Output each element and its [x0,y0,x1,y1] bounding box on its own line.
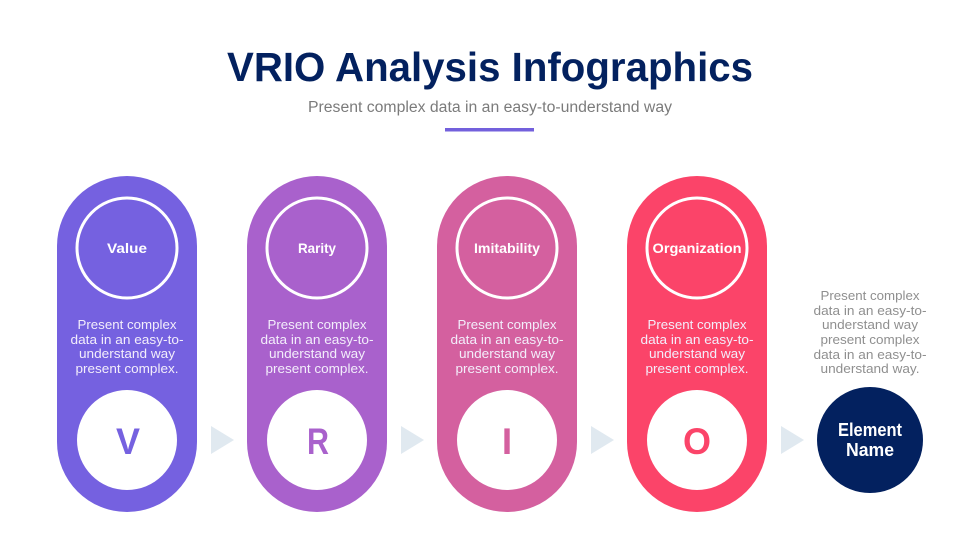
description: Present complex [78,317,177,332]
description: data in an easy-to- [640,332,754,347]
ring heading: Imitability: Imitability [474,240,540,256]
description: present complex. [456,361,558,376]
description: element: data in an easy-to- [814,303,926,318]
description: present complex. [76,361,178,376]
description: element: present complex [820,332,920,347]
pill background [627,176,767,512]
panel: Value [57,176,197,512]
ring heading: Value: Value [107,240,147,256]
description: element [814,288,926,376]
description: Present complex [268,317,367,332]
description: Present complex [458,317,557,332]
arrow [211,426,234,454]
pill background [57,176,197,512]
description [640,317,754,376]
ring heading: Rarity: Rarity [298,240,336,256]
description [260,317,374,376]
description [70,317,184,376]
letter circle: R: R [307,421,329,462]
panel: Imitability [437,176,577,512]
ring heading: Value [77,198,177,298]
description: understand way [269,346,366,361]
ring heading: Imitability [457,198,557,298]
description: data in an easy-to- [70,332,184,347]
letter circle: V: V [116,421,140,462]
description: understand way [459,346,556,361]
title: VRIO Analysis Infographics [227,44,753,90]
description: element: data in an easy-to- [814,347,926,362]
description: understand way [79,346,176,361]
arrow [401,426,424,454]
description: present complex. [266,361,368,376]
pill background [437,176,577,512]
description: data in an easy-to- [450,332,564,347]
letter circle: V [77,390,177,490]
ring heading: Organization [647,198,747,298]
panel: Rarity [247,176,387,512]
description [450,317,564,376]
element name circle: Element [838,420,902,440]
panel: Organization [627,176,767,512]
element name circle: Name [846,440,894,460]
description: element: Present complex [820,288,920,303]
letter circle: I: I [502,421,512,462]
arrow [591,426,614,454]
ring heading: Rarity [267,198,367,298]
letter circle: O: O [683,421,711,462]
description: element: understand way. [820,361,920,376]
element name circle [817,387,923,493]
letter circle: R [267,390,367,490]
description: data in an easy-to- [260,332,374,347]
letter circle: I [457,390,557,490]
ring heading: Organization: Organization [652,240,742,256]
title underline [445,128,534,132]
pill background [247,176,387,512]
description: understand way [649,346,746,361]
description: present complex. [646,361,748,376]
arrow [781,426,804,454]
description: element: understand way [822,317,919,332]
subtitle: Present complex data in an easy-to-understand way [308,99,672,116]
description: Present complex [648,317,747,332]
letter circle: O [647,390,747,490]
